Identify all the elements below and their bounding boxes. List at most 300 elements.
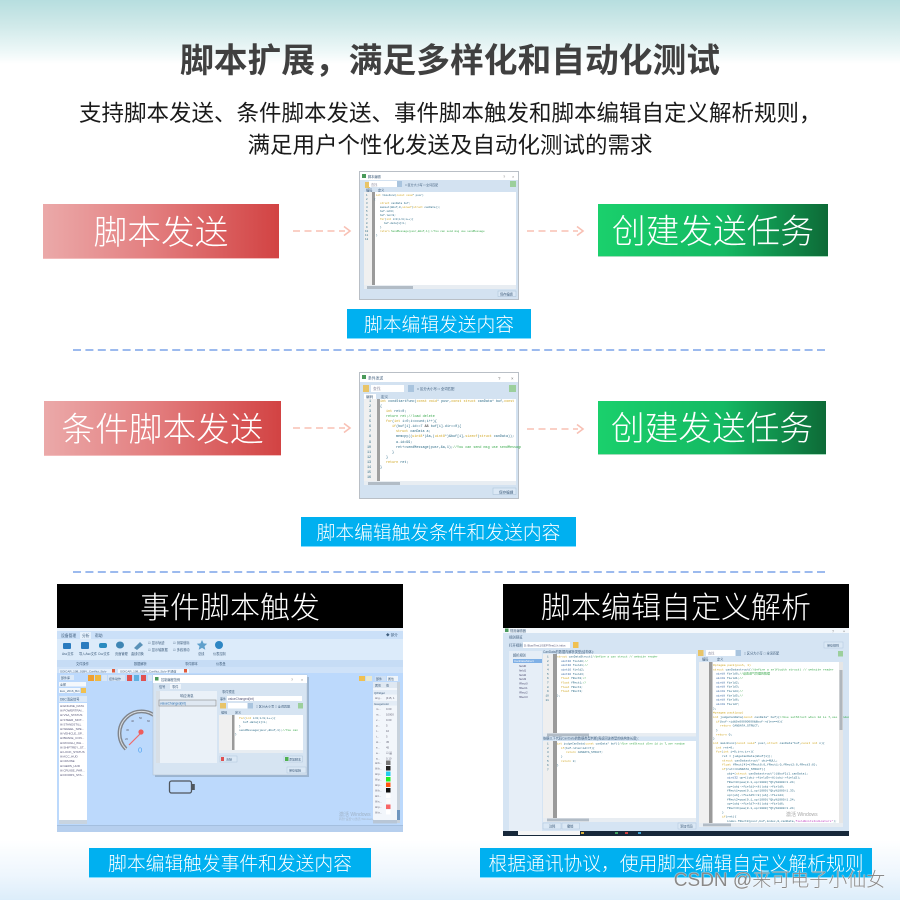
- screenshot: script editor window: }: [380, 225, 382, 229]
- arrow: conditional send to editor: [293, 423, 352, 433]
- screenshot: script editor window: 4: [366, 206, 368, 209]
- left signal panel: ⊞ GERS_HUD: [60, 764, 81, 768]
- screenshot: event script application: 分析: [82, 633, 90, 638]
- toolbar: [88, 675, 152, 681]
- label: conditional script send: 条件脚本发送: [61, 410, 264, 448]
- screenshot: conditional script editor window: 11: [367, 451, 371, 455]
- screenshot: custom parse rule window: 规则预览: [509, 634, 523, 640]
- parse script code panel: obj=(struct canDatastruct*)(&buf[i].canData);: [727, 771, 808, 775]
- parse script code panel: if(ret){: [722, 815, 737, 819]
- left signal panel: ⊞ STEER_MOT...: [60, 718, 84, 722]
- event script dialog: for(int i=0;i<8;i++){: [239, 716, 276, 720]
- rule tree: CanDataStruct: [514, 659, 534, 663]
- struct definition code panel: uint16 field2;: [561, 668, 585, 672]
- parse script code panel: uint8 field7;: [716, 702, 740, 706]
- screenshot: script editor window: 10: [365, 230, 369, 233]
- heading: event script trigger: [57, 584, 403, 628]
- struct definition code panel: 10: [546, 694, 549, 698]
- rule tree: fRect3: [519, 695, 528, 699]
- property panel: a...: [376, 756, 380, 760]
- label: create send task: [598, 204, 828, 257]
- event script dialog: 编码: [221, 710, 227, 714]
- left signal panel: ⊞ CRUISE: [60, 759, 75, 763]
- screenshot: conditional script editor window: if(buf[i].id==7 && buf[i].dir==0){: [392, 424, 461, 429]
- property panel: 0.10: [386, 756, 392, 760]
- property panel: v...: [376, 718, 380, 722]
- left signal panel: ⊞ CRUISE_PAR...: [60, 768, 85, 772]
- screenshot: event script application: 曲线切换: [131, 651, 145, 656]
- struct definition code panel: 5: [547, 673, 549, 676]
- property panel: t...: [376, 729, 379, 733]
- screenshot: event script application: SOICAR_108_01BV_Conflict_Solv: [60, 670, 107, 674]
- taskbar: [503, 831, 849, 836]
- parse script code panel: fRect3=pow(0.1,up/1000)*Qty%1000/1.24;: [727, 806, 796, 810]
- left signal panel: ⊞ LOCK_STATUS: [60, 750, 85, 754]
- left signal panel: ⊞ SHIFTREY_ST...: [60, 745, 86, 749]
- screenshot: conditional script editor window: 15: [367, 471, 371, 475]
- struct definition code panel: 1: [547, 656, 549, 658]
- screenshot: conditional script editor window: int condStartFunc(const void* pusr,const struct canData* buf,const: [380, 399, 514, 404]
- screenshot: script editor window: 保存编辑: [500, 292, 514, 296]
- property panel: ⊞ b...: [375, 788, 382, 792]
- left signal panel: ⊞ ENGINE_DATA: [60, 704, 84, 708]
- left signal panel: ⊞ DOORS_STA...: [60, 773, 84, 777]
- gauge widget: 0: [138, 746, 142, 754]
- left signal panel: 全部: [60, 682, 66, 687]
- parse script code panel: fRect2=pow(0.1,up/1000)*Qty%1000/1.24;: [727, 797, 796, 801]
- screenshot: custom parse rule window: D:/Bus/Test1/SEP/Test1.h.infos: [524, 644, 566, 648]
- parse judge code panel: 2: [547, 747, 549, 750]
- screenshot: script editor window: buf.len=8;: [380, 213, 396, 217]
- parse script code panel: }: [722, 810, 724, 814]
- property panel: ⊞ p...: [375, 778, 382, 782]
- parse script code panel: }: [713, 737, 715, 741]
- parse judge code panel: return 0;: [561, 760, 576, 763]
- property panel: ⊞ g...: [375, 696, 382, 700]
- parse judge code panel: 依据以下代码CanData的数据类型判断(需返回该类型的结构体长度)：: [543, 736, 641, 740]
- property panel: ⊞ p...: [375, 783, 382, 787]
- screenshot: event script application: SOICAR_108_01BV_Conflict_Solv-不通信: [120, 668, 176, 674]
- screenshot: event script application: 设备管理: [61, 633, 76, 638]
- parse judge code panel: if(buf->dlen>id==7){: [561, 746, 595, 750]
- rule buttons: [543, 823, 696, 829]
- struct definition code panel: uint16 field3;: [561, 672, 585, 676]
- property panel: e...: [376, 746, 380, 750]
- screenshot: conditional script editor window: return ret;: [386, 460, 408, 465]
- screenshot: conditional script editor window: ret+=sendMessage(pusr,&a,1);//You can send msg use sendMessage: [396, 445, 521, 450]
- subtitle text: [79, 101, 822, 158]
- rule buttons: 撤销: [567, 824, 574, 828]
- rule tree: 解析规则: [513, 652, 526, 658]
- arrow: script send to editor: [293, 226, 352, 236]
- screenshot: conditional script editor window: ×: [511, 376, 514, 381]
- parse script code panel: float fRect[4]={fRect0:0,fRect1:0,fRect2:0,fRect3:0};: [722, 763, 818, 767]
- screenshot: script editor window: ×: [512, 174, 515, 179]
- arrow: editor to send task: [527, 226, 584, 236]
- screenshot: script editor window: 8: [366, 222, 368, 225]
- left signal panel: DBC消息信号: [60, 696, 79, 702]
- property panel: [359, 676, 400, 824]
- struct definition code panel: 4: [547, 668, 549, 672]
- toolbar: 控件动作: [109, 676, 121, 681]
- parse script code panel: □ 区分大小写 □ 全词匹配: [744, 651, 780, 656]
- parse script code panel: up=(obj->field7<<8)|obj->field6;: [727, 802, 785, 806]
- screenshot: script editor window: 9: [366, 226, 368, 229]
- label: conditional script send: [44, 401, 281, 456]
- gauge widget: 40: [131, 719, 135, 723]
- left signal panel: ⊞ BRAKE_CON...: [60, 736, 85, 740]
- subtitle text: 满足用户个性化发送及自动化测试的需求: [247, 133, 652, 158]
- screenshot: custom parse rule window: [503, 628, 849, 836]
- parse script code panel: if(buf->id&0x00000000&&buf->dlen==8){: [716, 719, 783, 723]
- caption: script edit send content: 脚本编辑发送内容: [364, 314, 514, 335]
- screenshot: script editor window: 12: [365, 238, 369, 241]
- event script dialog: 事件: [220, 696, 226, 701]
- left signal panel: ⊞ POWERTRAI...: [60, 709, 84, 713]
- event script dialog: }: [239, 724, 241, 728]
- screenshot: script editor window: 脚本编辑: [368, 174, 382, 179]
- screenshot: script editor window: return SendMessage(pusr,&buf,1);//You can send msg use sendMessage: [380, 229, 485, 233]
- property panel: 5: [386, 724, 388, 728]
- parse judge code panel: 7: [547, 768, 549, 771]
- screenshot: event script application: 数据解析: [134, 661, 148, 666]
- screenshot: script editor window: buf.id=0;: [380, 209, 395, 213]
- rule tree: field0: [519, 664, 527, 668]
- parse script code panel: uint8 field5;//: [716, 693, 743, 697]
- screenshot: conditional script editor window: 3: [369, 410, 371, 414]
- parse judge code panel: 5: [547, 760, 549, 763]
- event script dialog: 添加脚本: [289, 756, 301, 762]
- screenshot: event script application: ◆ 部分: [386, 632, 398, 637]
- screenshot: script editor window: □ 区分大小写 □ 全词匹配: [405, 182, 438, 187]
- rule tree: field1: [519, 668, 527, 672]
- gauge widget: 20: [125, 737, 129, 741]
- parse script code panel: fRect1=pow(0.1,up/1000)*Qty%1000/1.33;: [727, 789, 796, 793]
- parse script code panel: int mainFunc(const void* pusr,struct canData*buf,const int n){: [713, 741, 825, 745]
- gauge widget: 50: [139, 716, 143, 720]
- property panel: ⊞ t...: [375, 794, 381, 798]
- parse judge code panel: 1: [547, 742, 549, 746]
- property panel: m...: [376, 712, 381, 716]
- screenshot: event script application: ☑ 测量值标: [173, 640, 190, 645]
- screenshot: script editor window: 3: [366, 202, 368, 205]
- screenshot: conditional script editor window: }: [386, 455, 388, 460]
- screenshot: event script application: ☑ 显示轨迹: [148, 640, 165, 645]
- left signal panel: ⊞ VSA_STATUS: [60, 713, 82, 717]
- parse judge code panel: }: [561, 754, 563, 758]
- gauge widget: 30: [126, 728, 130, 732]
- property panel: 10000: [386, 712, 394, 716]
- property panel: t...: [376, 734, 379, 738]
- screenshot: event script application: 转到"设置"以激活 Windows。: [339, 817, 375, 821]
- screenshot: script editor window: }: [376, 233, 378, 237]
- screenshot: conditional script editor window: 编码: [366, 394, 374, 399]
- watermark: CSDN @来可电子小仙女: [674, 870, 885, 891]
- rule buttons: 添加代码: [680, 824, 693, 828]
- event script dialog: ×: [301, 678, 303, 682]
- screenshot: event script application: ☑ 显示轴数据: [148, 647, 168, 652]
- event script dialog: 事件预览: [222, 689, 235, 694]
- struct definition code panel: float fRect1;//: [561, 680, 587, 684]
- struct definition code panel: [543, 649, 696, 736]
- divider line: [73, 571, 825, 573]
- parse script code panel: uint8 field3;: [716, 685, 740, 689]
- screenshot: conditional script editor window: for(int i=0;i<count;i++){: [386, 419, 437, 424]
- parse judge code panel: 3: [547, 751, 549, 754]
- rule buttons: 注释: [549, 824, 556, 828]
- left signal panel: ⊞ WHEEL_SPE...: [60, 727, 84, 731]
- arrow: conditional editor to send task: [527, 424, 584, 434]
- rule tree: field2: [519, 673, 527, 677]
- property panel: ⊞ p...: [375, 772, 382, 776]
- label: create send task: 创建发送任务: [612, 212, 814, 250]
- screenshot: conditional script editor window: 查找: [373, 386, 381, 391]
- screenshot: conditional script editor window: 2: [369, 405, 371, 409]
- parse script code panel: struct canDatastruct* obj=NULL;: [722, 758, 778, 762]
- parse script code panel: return 0;: [716, 733, 732, 736]
- property panel: [415, 1: [386, 696, 395, 700]
- screenshot: script editor window: {: [374, 197, 376, 201]
- screenshot: script editor window: memset(&buf,0,sizeof(struct canData));: [380, 205, 441, 209]
- event script dialog: 信号: [159, 684, 165, 689]
- struct definition code panel: 6: [547, 677, 549, 680]
- parse judge code panel: 6: [547, 764, 549, 767]
- label: create send task 2: 创建发送任务: [611, 410, 813, 448]
- property panel: 属性: [388, 676, 394, 681]
- event script dialog: ?: [291, 678, 293, 682]
- parse script code panel: ret = judgeCanData(&buf[i]);: [722, 754, 773, 758]
- parse script code panel: up=(obj->field1<<8)|obj->field0;: [727, 784, 785, 788]
- screenshot: event script application: 激活 Windows: [339, 811, 371, 818]
- property panel: 0.00: [386, 718, 392, 722]
- screenshot: event script application: 仪表控制: [213, 651, 226, 656]
- struct definition code panel: CanData的数据内解析类型(结构体)：: [543, 649, 596, 654]
- left signal panel: ⊞ ROUGH_WH...: [60, 741, 84, 745]
- screenshot: conditional script editor window: 1: [369, 400, 371, 404]
- parse script code panel: for(int i=0;i<n;i++){: [716, 750, 754, 754]
- property panel: ⊞ b...: [375, 766, 382, 770]
- parse script code panel: #pragma pack(pop): [713, 711, 744, 715]
- screenshot: conditional script editor window: 13: [367, 461, 371, 465]
- property panel: 部件: [376, 676, 382, 681]
- property panel: ⊞ b...: [375, 761, 382, 765]
- rule tree: fRect1: [519, 686, 528, 690]
- gauge widget: [119, 711, 164, 754]
- event script dialog: 定义: [235, 710, 241, 714]
- event script dialog: sendMessage(pusr,&buf,1);//You can: [239, 728, 298, 732]
- property panel: 10: [386, 729, 390, 733]
- left signal panel: ⊞ STANDSTILL: [60, 722, 82, 726]
- screenshot: event script application: Csv文件: [98, 651, 111, 656]
- screenshot: script editor window: 定义: [378, 188, 385, 192]
- screenshot: custom parse rule window: ?: [832, 630, 834, 634]
- screenshot: event script application: 导入Asc文件: [79, 651, 98, 656]
- property panel: 45: [386, 740, 390, 744]
- screenshot: custom parse rule window: 保存规则: [827, 642, 839, 648]
- property panel: ☑ 是: [386, 751, 392, 755]
- rule tree: field3: [519, 677, 527, 681]
- screenshot: script editor window: 查找: [371, 182, 378, 187]
- event script dialog: 保存编辑: [289, 768, 301, 772]
- parse script code panel: index.fRect0(pusr,buf,index,0,canData,fieldUnitsIndicators*);: [727, 819, 837, 823]
- struct definition code panel: float fRect0;//: [561, 676, 587, 680]
- left signal panel: ⊞ ACC_HUD: [60, 755, 79, 759]
- screenshot: script editor window: 编码: [366, 188, 372, 192]
- screenshot: conditional script editor window: 条件发送: [368, 376, 383, 380]
- left signal panel: [59, 675, 87, 824]
- screenshot: conditional script editor window: 16: [367, 476, 371, 480]
- struct definition code panel: uint16 field0;//: [561, 659, 588, 663]
- screenshot: conditional script editor window: 定义: [381, 394, 389, 399]
- parse script code panel: if(ret==CANDATA_STRUCT){: [722, 767, 765, 771]
- rule tree: fRect2: [519, 690, 528, 694]
- caption: custom parse rule: 根据通讯协议，使用脚本编辑自定义解析规则: [488, 853, 864, 874]
- screenshot: conditional script editor window: 9: [369, 441, 371, 445]
- parse script code panel: }: [716, 728, 718, 732]
- parse script code panel: uint8 field0;//设置进气管理的数据: [716, 671, 770, 676]
- parse script code panel: uint32 up=((obj->field3<<8)|obj->field2);: [727, 776, 801, 780]
- caption: trigger event: 脚本编辑触发事件和发送内容: [108, 853, 352, 874]
- screenshot: script editor window: 5: [366, 210, 368, 213]
- heading: custom parse script: [503, 584, 849, 628]
- left signal panel: 部件库: [61, 675, 70, 680]
- struct definition code panel: float fRect3;: [561, 689, 583, 693]
- parse script code panel: fRect0=pow(0.1,up/1000)*Qty%1000/1.24;: [727, 780, 796, 784]
- screenshot: conditional script editor window: 5: [369, 420, 371, 424]
- event script dialog: 控制编程范例: [161, 677, 180, 682]
- event script dialog: valueChanged(int): [160, 701, 186, 705]
- screenshot: conditional script editor window: ?: [498, 376, 501, 381]
- struct definition code panel: 11: [546, 699, 549, 702]
- left signal panel: Evo_2016_Bct: [60, 689, 80, 693]
- screenshot: script editor window: int timeFunc(const void* pusr): [376, 193, 424, 197]
- caption: trigger condition: 脚本编辑触发条件和发送内容: [317, 522, 560, 543]
- screenshot: conditional script editor window: struct canData a;: [396, 429, 431, 434]
- left signal panel: ⊞ VEHICLE_SP...: [60, 732, 84, 736]
- struct definition code panel: 7: [547, 682, 549, 684]
- screenshot: event script application: 帮助: [95, 633, 103, 638]
- divider line: [73, 349, 825, 351]
- screenshot: script editor window: 11: [365, 234, 369, 237]
- screenshot: conditional script editor window: 14: [367, 466, 371, 470]
- event script dialog: }: [235, 732, 237, 736]
- property panel: a...: [376, 751, 380, 755]
- screenshot: script editor window: 1: [366, 194, 368, 197]
- struct definition code panel: 8: [547, 686, 549, 689]
- screenshot: script editor window: 7: [366, 218, 368, 221]
- caption: custom parse rule: [480, 848, 872, 878]
- property panel: GaugeColor: [374, 702, 389, 706]
- screenshot: event script application: ☑ 多线滚动: [173, 647, 190, 652]
- screenshot: event script application: [57, 628, 403, 832]
- screenshot: conditional script editor window: 6: [369, 425, 371, 429]
- property panel: 0.00: [386, 707, 392, 711]
- property panel: st...: [376, 740, 381, 744]
- label: script send: [43, 204, 279, 259]
- screenshot: conditional script editor window: memcpy((uint8*)&a,(uint8*)&buf[i],sizeof(struct canData));: [396, 434, 514, 439]
- screenshot: conditional script editor window: a.id=99;: [396, 440, 412, 445]
- struct definition code panel: float fRect2;: [561, 685, 583, 689]
- heading: event script trigger: 事件脚本触发: [140, 592, 320, 624]
- screenshot: custom parse rule window: 规则编辑器: [510, 628, 527, 633]
- screenshot: conditional script editor window: }: [392, 450, 394, 455]
- event script dialog: valueChanged(int): [228, 697, 254, 701]
- parse judge code panel: return CANDATA_STRUCT;: [566, 751, 603, 754]
- parse script code panel: 激活 Windows: [786, 811, 818, 818]
- screenshot: conditional script editor window: 10: [367, 446, 371, 450]
- heading: custom parse script: 脚本编辑自定义解析: [541, 592, 811, 624]
- property panel: ⊞ s...: [375, 800, 382, 804]
- caption: trigger condition: [301, 517, 576, 547]
- event script dialog: buf.data[i]=i;: [243, 720, 268, 724]
- screenshot: conditional script editor window: 7: [369, 430, 371, 434]
- screenshot: event script application: 总线: [198, 651, 205, 656]
- screenshot: custom parse rule window: ×: [843, 630, 845, 634]
- screenshot: script editor window: 2: [366, 198, 368, 201]
- parse judge code panel: [543, 736, 696, 822]
- event script dialog: [153, 675, 309, 777]
- screenshot: event script application: 页面管理: [115, 651, 129, 656]
- subtitle text: 支持脚本发送、条件脚本发送、事件脚本触发和脚本编辑自定义解析规则，: [79, 101, 822, 126]
- rule tree: fRect0: [519, 682, 528, 686]
- parse script code panel: up=(obj->field5<<8)|obj->field4;: [727, 793, 785, 797]
- battery widget: [170, 781, 195, 793]
- rule tree: [509, 651, 542, 831]
- caption: trigger event: [89, 848, 371, 878]
- screenshot: conditional script editor window: return ret;//load delete: [386, 414, 435, 419]
- event script dialog: □ 区分大小写 □ 全词匹配: [256, 703, 290, 708]
- parse script code panel: uint8 field6;: [716, 698, 740, 702]
- property panel: p...: [376, 724, 380, 728]
- struct definition code panel: 9: [547, 690, 549, 693]
- label: script send: 脚本发送: [94, 214, 228, 252]
- screenshot: conditional script editor window: 4: [369, 415, 371, 419]
- title: 脚本扩展，满足多样化和自动化测试: [180, 42, 720, 80]
- struct definition code panel: 2: [547, 660, 549, 663]
- parse script code panel: 定义: [717, 656, 724, 662]
- screenshot: script editor window: 6: [366, 214, 368, 217]
- label: create send task 2: [598, 401, 826, 455]
- caption: script edit send content: [347, 309, 531, 339]
- event script dialog: 事件: [172, 684, 179, 689]
- property panel: 值: [386, 682, 389, 688]
- screenshot: custom parse rule window: 打开规则: [509, 642, 523, 648]
- struct definition code panel: 3: [547, 664, 549, 667]
- event script dialog: 清除: [226, 756, 232, 762]
- screenshot: event script application: Asc文件: [62, 651, 75, 656]
- parse script code panel: 编码: [702, 656, 708, 662]
- parse script code panel: 查找: [708, 651, 715, 656]
- parse judge code panel: 4: [547, 756, 549, 758]
- screenshot: conditional script editor window: 8: [369, 435, 371, 439]
- struct definition code panel: struct canDataStruct{//define a can struct // website reader: [557, 654, 658, 658]
- ribbon icons: [63, 640, 223, 650]
- screenshot: event script application: 事件脚本: [185, 661, 199, 666]
- parse script code panel: };: [713, 706, 717, 710]
- screenshot: script editor window: for(int i=0;i<8;i++){: [380, 217, 414, 221]
- screenshot: conditional script editor window: 12: [367, 456, 371, 460]
- property panel: 45: [386, 746, 390, 750]
- struct definition code panel: };: [557, 694, 561, 698]
- struct definition code panel: uint16 field1;//: [561, 663, 588, 667]
- screenshot: conditional script editor window: }: [380, 465, 382, 470]
- parse script code panel: uint8 field2;: [716, 680, 740, 684]
- event script dialog: 响应消息: [180, 693, 194, 698]
- parse script code panel: return CANDATA_STRUCT;: [720, 725, 760, 728]
- gauge widget: 60: [147, 719, 151, 723]
- screenshot: script editor window: ?: [503, 174, 506, 179]
- screenshot: event script application: 文件操作: [76, 661, 90, 666]
